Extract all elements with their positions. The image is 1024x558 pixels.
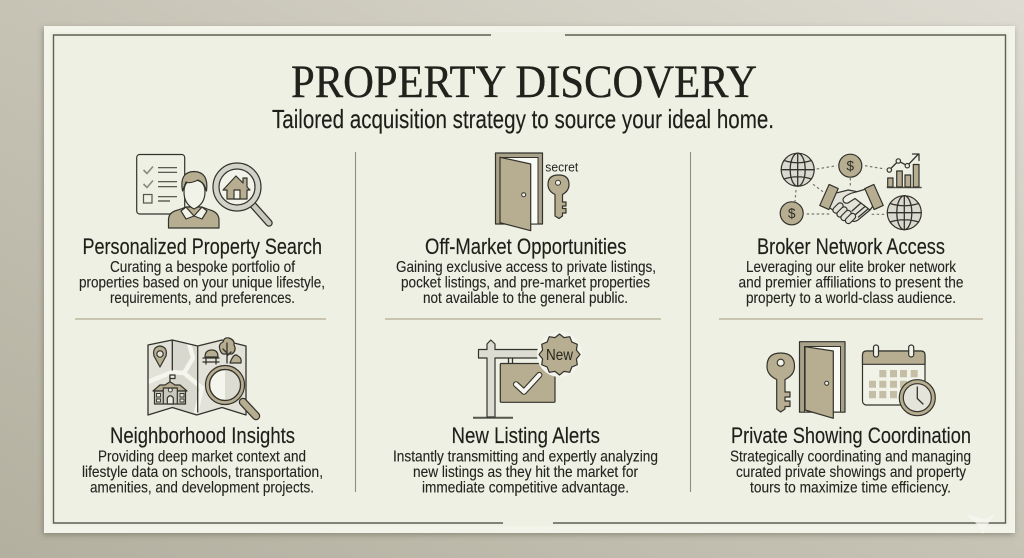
panel: private showing coordination xyxy=(730,342,971,496)
text block xyxy=(738,259,964,307)
icon: door and secret key xyxy=(496,153,579,231)
new badge label: New xyxy=(546,347,573,364)
text block xyxy=(396,259,656,307)
text block: new listings as they hit the market for xyxy=(413,464,639,481)
icon: broker network xyxy=(780,153,922,230)
text block xyxy=(82,448,323,496)
text block: Providing deep market context and xyxy=(98,448,306,466)
title: PROPERTY DISCOVERY xyxy=(291,56,757,108)
text block: requirements, and preferences. xyxy=(110,290,295,307)
watermark mark xyxy=(966,514,995,534)
heading: Broker Network Access xyxy=(757,234,945,259)
secret label: secret xyxy=(545,160,579,174)
text block xyxy=(79,259,325,307)
icon: key, door, calendar and clock xyxy=(767,342,935,418)
text block xyxy=(730,448,971,496)
heading: New Listing Alerts xyxy=(452,423,600,448)
heading: Private Showing Coordination xyxy=(731,423,971,448)
icon: checklist, person and magnifier xyxy=(137,154,269,228)
heading: Off-Market Opportunities xyxy=(425,234,626,259)
panel: personalized property search xyxy=(79,154,325,307)
text block: and premier affiliations to present the xyxy=(738,274,964,292)
text block: Strategically coordinating and managing xyxy=(730,448,971,466)
text block: tours to maximize time efficiency. xyxy=(750,480,951,496)
text block: Gaining exclusive access to private listings, xyxy=(396,259,656,276)
subtitle: Tailored acquisition strategy to source your ideal home. xyxy=(272,104,774,134)
text block: curated private showings and property xyxy=(736,464,966,481)
icon: map and magnifier xyxy=(148,338,256,416)
column and row dividers xyxy=(75,152,983,492)
text block: Instantly transmitting and expertly analyzing xyxy=(393,448,658,466)
panel: broker network access xyxy=(738,153,964,307)
text block xyxy=(393,448,658,496)
icon: listing sign with new badge xyxy=(473,332,582,418)
panel: new listing alerts xyxy=(393,332,658,496)
heading: Neighborhood Insights xyxy=(110,423,295,448)
heading: Personalized Property Search xyxy=(82,234,322,259)
icon: broker network: $ xyxy=(847,158,855,174)
text block: Curating a bespoke portfolio of xyxy=(110,259,295,276)
text block: immediate competitive advantage. xyxy=(422,480,629,496)
text block: Leveraging our elite broker network xyxy=(746,259,957,276)
text block: lifestyle data on schools, transportation, xyxy=(82,464,323,481)
icon: broker network: $ xyxy=(788,206,796,221)
text block: property to a world-class audience. xyxy=(746,290,956,307)
text block: pocket listings, and pre-market properties xyxy=(401,274,650,292)
text block: amenities, and development projects. xyxy=(90,480,314,496)
panel: neighborhood insights xyxy=(82,338,323,496)
text block: properties based on your unique lifestyle, xyxy=(79,274,325,292)
text block: not available to the general public. xyxy=(423,290,628,307)
panel: off-market opportunities xyxy=(396,153,656,307)
